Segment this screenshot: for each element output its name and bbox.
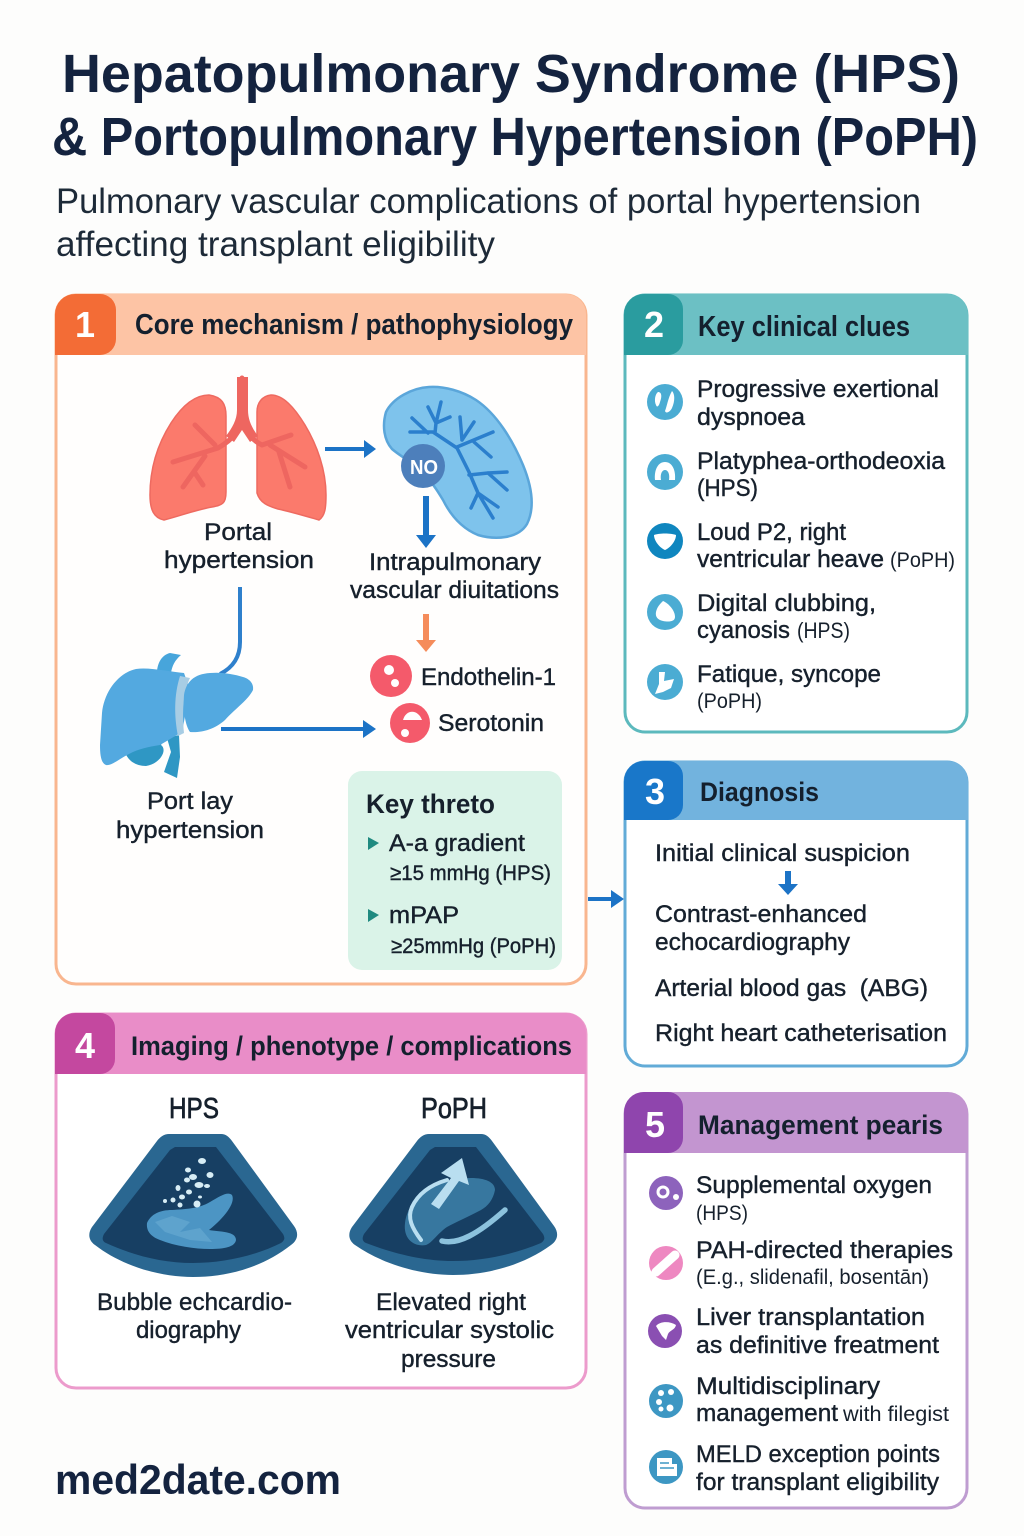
label: portal hypertension: hypertension xyxy=(164,547,314,574)
clue: loud P2: (PoPH) xyxy=(890,549,955,572)
clue: exertional dyspnoea: Progressive exertional xyxy=(697,376,939,403)
callout: key thresholds xyxy=(348,771,562,970)
diagnosis step: arterial blood gas: Arterial blood gas (ABG) xyxy=(655,975,928,1002)
mediator: endothelin-1: Endothelin-1 xyxy=(421,664,556,691)
subtitle: affecting transplant eligibility xyxy=(56,225,495,264)
panel 3 header: 3 xyxy=(645,771,665,812)
caption: bubble echo: diography xyxy=(136,1317,241,1344)
pearl: liver transplantation: as definitive freatment xyxy=(696,1332,939,1359)
panel 4 header: 4 xyxy=(75,1025,95,1066)
clue: fatigue and syncope xyxy=(647,661,881,713)
pearl: MELD exception points: MELD exception points xyxy=(696,1441,940,1468)
clue: clubbing and cyanosis: (HPS) xyxy=(797,618,850,643)
pearl: liver transplantation xyxy=(648,1304,939,1359)
pearl: PAH therapies: PAH-directed therapies xyxy=(696,1237,953,1264)
ultrasound: bubble echo xyxy=(89,1134,297,1277)
label: port lay hypertension: Port lay xyxy=(147,788,233,815)
pearl: multidisciplinary management xyxy=(649,1373,949,1427)
diagnosis step: echocardiography: Contrast-enhanced xyxy=(655,901,867,928)
arrow: lungs to vessels xyxy=(325,440,376,458)
label: intrapulmonary dilatations xyxy=(350,549,559,604)
clue: exertional dyspnoea xyxy=(647,376,939,431)
footer: site name: med2date.com xyxy=(55,1456,341,1503)
icon: lungs xyxy=(150,377,326,520)
icon: dilated pulmonary vessels: NO xyxy=(410,457,438,479)
pearl: supplemental oxygen: (HPS) xyxy=(696,1202,748,1225)
callout: key thresholds: ≥15 mmHg (HPS) xyxy=(390,862,551,885)
panel 3 header xyxy=(624,761,968,820)
title xyxy=(52,44,978,167)
label: intrapulmonary dilatations: vascular diuitations xyxy=(350,577,559,604)
panel 5 header: 5 xyxy=(645,1104,665,1145)
HPS ultrasound column xyxy=(89,1093,297,1344)
panel 1 header xyxy=(55,294,586,355)
diagnosis step: catheterisation: Right heart catheterisation xyxy=(655,1020,947,1047)
arrow: mechanism to diagnosis xyxy=(588,890,624,908)
clue: fatigue and syncope: (PoPH) xyxy=(697,690,762,713)
mediator: serotonin xyxy=(390,703,544,743)
arrow: orange down xyxy=(416,614,436,652)
panel: key clinical clues xyxy=(624,294,968,732)
caption: elevated pressure: ventricular systolic xyxy=(345,1317,554,1344)
label: portal hypertension: Portal xyxy=(204,519,272,546)
panel 1 header: Core mechanism / pathophysiology xyxy=(135,309,573,341)
ultrasound: right ventricular pressure xyxy=(349,1134,557,1275)
callout: key thresholds: Key threto xyxy=(366,789,495,819)
caption: bubble echo xyxy=(97,1289,292,1344)
PoPH ultrasound column: PoPH xyxy=(421,1093,487,1125)
icon: dilated pulmonary vessels xyxy=(384,387,532,538)
panel 1 header: 1 xyxy=(75,304,95,345)
diagnosis step: echocardiography xyxy=(655,901,867,956)
clue: loud P2: ventricular heave xyxy=(697,546,884,573)
callout: key thresholds: mPAP xyxy=(389,902,459,929)
arrow: diagnosis down xyxy=(778,871,798,895)
label: port lay hypertension: hypertension xyxy=(116,817,264,844)
label: intrapulmonary dilatations: Intrapulmonary xyxy=(369,549,541,576)
PoPH ultrasound column xyxy=(345,1093,557,1373)
caption: elevated pressure: pressure xyxy=(401,1346,496,1373)
clue: platypnoea-orthodeoxia: Platyphea-orthodeoxia xyxy=(697,448,946,475)
panel 5 header: Management pearis xyxy=(698,1110,943,1140)
pearl: PAH therapies xyxy=(649,1237,953,1289)
panel: management pearls xyxy=(624,1092,968,1508)
pearl: MELD exception points xyxy=(649,1441,940,1496)
panel 2 header: Key clinical clues xyxy=(698,311,910,343)
clue: loud P2: Loud P2, right xyxy=(697,519,846,546)
pearl: supplemental oxygen xyxy=(649,1172,932,1225)
panel 5 header xyxy=(624,1092,968,1153)
subtitle xyxy=(56,182,921,264)
panel 4 header xyxy=(55,1013,586,1074)
callout: key thresholds: A-a gradient xyxy=(389,830,525,857)
panel: imaging xyxy=(55,1013,586,1388)
pearl: multidisciplinary management: management xyxy=(696,1400,838,1427)
panel: core mechanism xyxy=(55,294,586,984)
clue: clubbing and cyanosis: Digital clubbing, xyxy=(697,590,876,617)
callout: key thresholds: ≥25mmHg (PoPH) xyxy=(391,935,556,958)
panel 2 header: 2 xyxy=(644,304,664,345)
diagnosis step: suspicion: Initial clinical suspicion xyxy=(655,840,910,867)
pearl: liver transplantation: Liver transplantation xyxy=(696,1304,925,1331)
pearl: multidisciplinary management: with filegist xyxy=(842,1403,949,1426)
label: portal hypertension xyxy=(164,519,314,574)
panel 3 header: Diagnosis xyxy=(700,777,819,807)
clue: fatigue and syncope: Fatique, syncope xyxy=(697,661,881,688)
title: Hepatopulmonary Syndrome (HPS) xyxy=(62,44,960,104)
panel 4 header: Imaging / phenotype / complications xyxy=(131,1031,572,1061)
pearl: MELD exception points: for transplant eligibility xyxy=(696,1469,939,1496)
arrow: liver to mediators xyxy=(221,720,376,738)
panel 2 header xyxy=(624,294,968,355)
caption: elevated pressure xyxy=(345,1289,554,1373)
subtitle: Pulmonary vascular complications of portal hypertension xyxy=(56,182,921,221)
caption: bubble echo: Bubble echcardio- xyxy=(97,1289,292,1316)
clue: loud P2 xyxy=(647,519,955,573)
pearl: PAH therapies: (E.g., slidenafil, bosentān) xyxy=(696,1266,929,1289)
icon: liver xyxy=(100,653,253,778)
pearl: supplemental oxygen: Supplemental oxygen xyxy=(696,1172,932,1199)
connector: portal line to liver xyxy=(220,587,240,674)
label: port lay hypertension xyxy=(116,788,264,844)
clue: clubbing and cyanosis xyxy=(647,590,876,644)
diagnosis step: echocardiography: echocardiography xyxy=(655,929,850,956)
clue: clubbing and cyanosis: cyanosis xyxy=(697,617,790,644)
clue: platypnoea-orthodeoxia: (HPS) xyxy=(697,475,758,502)
caption: elevated pressure: Elevated right xyxy=(376,1289,526,1316)
mediator: endothelin-1 xyxy=(370,655,556,697)
clue: platypnoea-orthodeoxia xyxy=(647,448,946,502)
HPS ultrasound column: HPS xyxy=(169,1093,219,1125)
clue: exertional dyspnoea: dyspnoea xyxy=(697,404,806,431)
arrow: down to dilatations xyxy=(416,496,436,548)
panel: diagnosis xyxy=(624,761,968,1066)
pearl: multidisciplinary management: Multidisciplinary xyxy=(696,1373,880,1400)
mediator: serotonin: Serotonin xyxy=(438,710,544,737)
